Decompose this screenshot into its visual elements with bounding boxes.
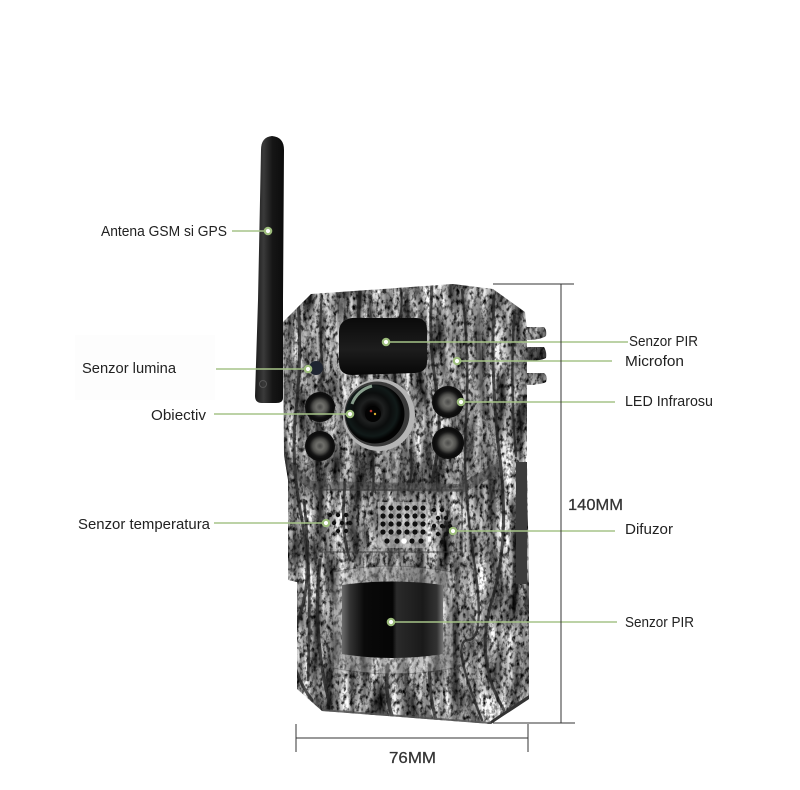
lower PIR sensor window <box>342 582 443 658</box>
callout: Microfon <box>454 354 684 370</box>
callout: Senzor temperatura <box>78 517 329 533</box>
callout: Senzor PIR bottom: Senzor PIR <box>625 615 694 631</box>
lower PIR sensor frame <box>333 566 454 674</box>
lower panel shading <box>283 455 502 492</box>
camouflage shell <box>280 280 535 730</box>
camera body <box>280 280 550 730</box>
light sensor <box>309 361 323 375</box>
callout: Difuzor <box>450 522 673 538</box>
callout: Senzor PIR top: Senzor PIR <box>629 334 698 350</box>
callout: Senzor lumina: Senzor lumina <box>82 361 177 377</box>
camera mounting lugs <box>526 327 547 385</box>
callout: Difuzor: Difuzor <box>625 522 673 538</box>
width dimension: 76MM <box>389 750 436 767</box>
callout: Antena GSM si GPS: Antena GSM si GPS <box>101 224 227 240</box>
side strip <box>516 462 527 584</box>
upper PIR sensor window <box>339 318 427 375</box>
infrared LEDs <box>305 386 464 461</box>
callout: Senzor PIR top <box>383 334 698 350</box>
callout: Senzor temperatura: Senzor temperatura <box>78 517 211 533</box>
callout: Microfon: Microfon <box>625 354 684 370</box>
callout: Obiectiv: Obiectiv <box>151 408 207 424</box>
callout: Senzor lumina <box>82 361 311 377</box>
icon: antenna <box>255 136 284 403</box>
lens assembly <box>343 379 415 451</box>
callout: LED Infrarosu <box>458 394 713 410</box>
callout: Senzor PIR bottom <box>388 615 694 631</box>
speaker and temperature grilles <box>328 502 452 548</box>
callout: LED Infrarosu: LED Infrarosu <box>625 394 713 410</box>
background patch behind light sensor label <box>75 335 215 400</box>
callout: Obiectiv <box>151 408 353 424</box>
height dimension: 140MM <box>568 497 623 514</box>
